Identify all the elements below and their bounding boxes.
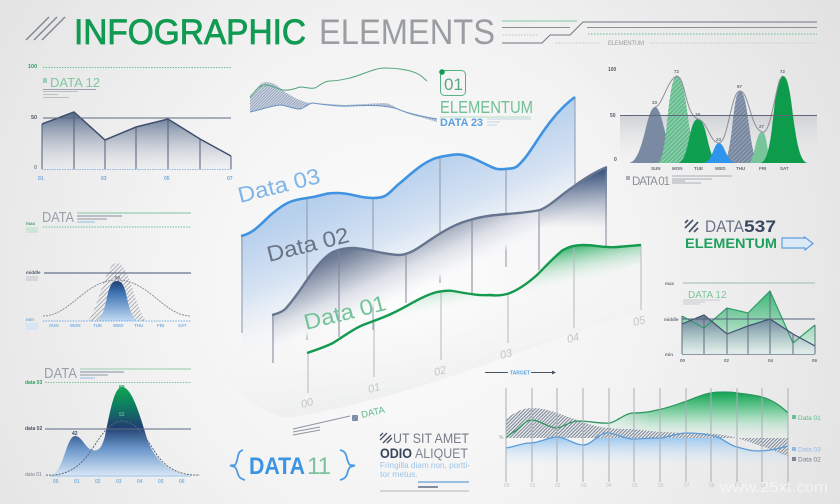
icon: title slashes <box>26 17 65 40</box>
main chart x labels: 05 <box>632 314 647 329</box>
main chart x labels: 01 <box>367 381 382 396</box>
chart: top-left line chart Data 12: 0 <box>34 165 37 171</box>
main chart: data 02 <box>264 167 607 385</box>
label: data 03: Data 03 <box>235 163 323 208</box>
chart: bottom-right multi-series: 02 <box>555 483 561 489</box>
chart: bottom-left mountain chart <box>25 366 200 485</box>
chart: top-right bell chart: 23 <box>716 137 722 142</box>
chart: top-right bell chart: MON <box>672 166 682 171</box>
chart: top-left line chart Data 12: 100 <box>28 64 37 70</box>
main chart x labels: 00 <box>300 396 315 411</box>
chart: top-left line chart Data 12: 50 <box>31 115 37 121</box>
chart: left middle bell chart: FRI <box>157 323 164 328</box>
title <box>26 13 495 52</box>
chart: bottom-left mountain chart: 42 <box>72 431 78 437</box>
chart: top-right bell chart: 67 <box>737 84 743 89</box>
text block: ut sit amet: tor metus. <box>380 469 418 479</box>
chart: bottom-right multi-series: 05 <box>632 483 638 489</box>
title block: data537 elementum: 537 <box>744 217 776 236</box>
callout: 01 elementum data 23: DATA 23 <box>440 117 483 129</box>
heading: data: DATA <box>44 366 77 382</box>
chart: left middle bell chart: 50 <box>115 275 121 280</box>
chart: right small area chart: max <box>665 281 675 286</box>
title text: infographic: INFOGRAPHIC <box>74 13 306 52</box>
chart: bottom-left mountain chart: 01 <box>74 479 80 485</box>
chart: top-right bell chart: 72 <box>674 69 680 74</box>
title block: data537 elementum <box>685 217 813 251</box>
chart: left middle bell chart <box>26 210 191 330</box>
chart: right small area chart: 00 <box>680 358 686 363</box>
heading: data 01 <box>626 176 732 188</box>
callout: 01 elementum data 23: ELEMENTUM <box>440 97 533 117</box>
callout: 01 elementum data 23: 01 <box>444 75 463 94</box>
chart: top-right bell chart: SAT <box>780 166 789 171</box>
legend: Data 01 <box>798 415 821 422</box>
chart: left middle bell chart: SAT <box>178 323 187 328</box>
green fill <box>602 392 788 434</box>
callout: data label on floor: DATA <box>360 405 387 421</box>
chart: bottom-right multi-series: 01 <box>530 483 536 489</box>
chart: bottom-right multi-series: 10 <box>760 483 766 489</box>
main chart x labels: 04 <box>566 331 581 346</box>
chart: top-right bell chart: FRI <box>759 166 766 171</box>
chart: bottom-right multi-series: 06 <box>658 483 664 489</box>
chart: top-left line chart Data 12 <box>28 64 233 182</box>
chart: right small area chart: min <box>665 352 673 357</box>
main chart x labels <box>300 314 647 411</box>
chart: bottom-right multi-series: 07 <box>684 483 690 489</box>
text block: ut sit amet: Fringilla diam non, portti- <box>380 460 470 470</box>
hatched band <box>506 408 788 456</box>
text block: ut sit amet: UT SIT AMET <box>393 431 469 446</box>
chart: top-right bell chart: SUN <box>651 166 661 171</box>
heading: data 12 small: DATA 12 <box>688 290 727 301</box>
chart: bottom-right multi-series: 04 <box>606 483 612 489</box>
chart: right small area chart: 04 <box>768 358 774 363</box>
text block: ut sit amet: ODIO <box>380 446 412 461</box>
callout: data label on floor <box>293 405 387 435</box>
chart: left middle bell chart: WED <box>113 323 124 328</box>
arrow: target <box>485 370 556 376</box>
chart: top-left line chart Data 12: 05 <box>164 176 170 182</box>
chart: top-right bell chart: THU <box>736 166 745 171</box>
chart: bottom-left mountain chart: 00 <box>53 479 59 485</box>
chart: right small area chart <box>664 281 818 363</box>
main chart: data 03 <box>235 97 575 362</box>
chart: left middle bell chart: max <box>26 221 36 226</box>
chart: bottom-left mountain chart: 05 <box>158 479 164 485</box>
chart: top-right bell chart: TUE <box>694 166 703 171</box>
blue fill <box>506 433 788 468</box>
icon: hatch small <box>380 433 392 443</box>
chart: right small area chart: 06 <box>812 358 818 363</box>
chart: top-right bell chart: WED <box>715 166 726 171</box>
label: data 01: Data 01 <box>301 290 389 335</box>
chart: left middle bell chart: SUN <box>49 323 59 328</box>
chart: top-right bell chart: 19 <box>695 112 701 117</box>
chart: top-right bell chart <box>608 67 817 188</box>
icon: right brace <box>340 450 355 480</box>
chart: bottom-left mountain chart: 89 <box>119 385 125 391</box>
chart: left middle bell chart: min <box>26 317 34 322</box>
chart: bottom-left mountain chart: data 03 <box>25 380 42 386</box>
chart: top-left line chart Data 12: 07 <box>227 176 233 182</box>
text block: ut sit amet <box>380 431 470 491</box>
arrow: target: TARGET <box>510 370 530 376</box>
chart: bottom-right multi-series: 09 <box>735 483 741 489</box>
icon: blue arrow <box>782 236 813 250</box>
title text: elements: ELEMENTS <box>319 13 495 52</box>
chart: top-right bell chart: 100 <box>608 67 617 73</box>
legend <box>792 415 821 464</box>
label: data 02: Data 02 <box>264 222 352 267</box>
chart: bottom-right multi-series <box>499 388 821 489</box>
icon: hatch <box>685 220 698 232</box>
chart: bottom-left mountain chart: 03 <box>116 479 122 485</box>
chart: bottom-left mountain chart: data 01 <box>25 472 42 478</box>
chart: top-right bell chart: 0 <box>614 157 617 163</box>
callout: 01 elementum data 23 <box>439 69 533 129</box>
chart: top-right bell chart: 50 <box>610 113 616 119</box>
main chart x labels: 02 <box>433 364 448 379</box>
heading: data: DATA <box>42 210 74 226</box>
chart: left middle bell chart: THU <box>134 323 143 328</box>
chart: top-right bell chart: 33 <box>652 100 658 105</box>
chart: bottom-left mountain chart: 06 <box>179 479 185 485</box>
chart: top-left line chart Data 12: 01 <box>38 176 44 182</box>
chart: top-left line chart Data 12: 03 <box>101 176 107 182</box>
legend: Data 03 <box>798 446 821 454</box>
header circuit lines: ELEMENTUM <box>608 41 644 47</box>
heading: data 01: DATA 01 <box>632 176 670 188</box>
main chart: data 01 <box>301 245 641 393</box>
chart: left middle bell chart: MON <box>70 323 80 328</box>
chart: top-right bell chart: 72 <box>780 69 786 74</box>
chart: right small area chart: 02 <box>724 358 730 363</box>
heading: data 12: DATA 12 <box>50 75 100 90</box>
legend: Data 02 <box>798 456 821 464</box>
chart: bottom-left mountain chart: data 02 <box>25 426 42 432</box>
chart: top-right bell chart: 27 <box>759 124 765 129</box>
chart: right small area chart: middle <box>664 317 679 322</box>
icon: left brace <box>230 450 245 480</box>
text block: ut sit amet: ALIQUET <box>415 446 468 461</box>
chart: bottom-left mountain chart: 04 <box>137 479 143 485</box>
chart: bottom-right multi-series: 11 <box>786 483 791 489</box>
chart: left middle bell chart: middle <box>26 270 41 275</box>
badge: data11: 11 <box>307 453 331 480</box>
badge: data11: DATA <box>249 453 305 480</box>
badge: data11 <box>230 450 355 480</box>
chart: left middle bell chart: TUE <box>93 323 102 328</box>
chart: bottom-right multi-series: 03 <box>581 483 587 489</box>
chart: bottom-right multi-series: 00 <box>504 483 510 489</box>
chart: bottom-left mountain chart: 02 <box>95 479 101 485</box>
chart: bottom-right multi-series: % <box>499 435 504 441</box>
header circuit lines <box>502 21 817 47</box>
watermark: www.25xt.com <box>719 479 828 496</box>
chart: top-middle hatch lines <box>250 68 437 122</box>
perspective floor behind main chart <box>205 260 640 418</box>
title block: data537 elementum: ELEMENTUM <box>685 236 777 251</box>
title block: data537 elementum: DATA <box>705 217 745 236</box>
chart: bottom-left mountain chart: 52 <box>119 412 125 418</box>
main chart x labels: 03 <box>499 347 514 362</box>
chart: bottom-right multi-series: 08 <box>709 483 715 489</box>
